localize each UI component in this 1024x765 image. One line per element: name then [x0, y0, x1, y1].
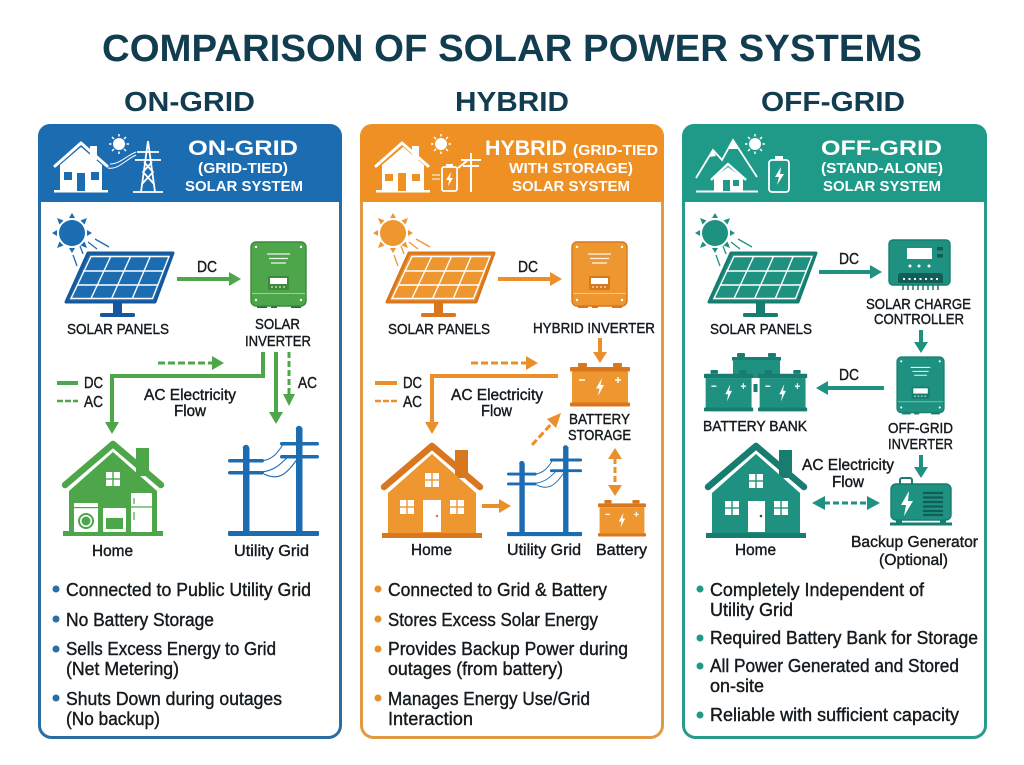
label: ac electricity flow: Flow	[481, 403, 513, 420]
label: ac electricity flow: AC Electricity	[802, 457, 894, 474]
icon: sun	[373, 213, 430, 266]
label: off-grid inverter: OFF-GRID	[888, 421, 953, 437]
bullet list: hybrid: Interaction	[388, 708, 473, 729]
icon: utility grid	[507, 445, 582, 536]
bullet list: off-grid: Required Battery Bank for Storage	[710, 627, 978, 648]
arrow: home to grid	[482, 499, 511, 513]
label: ac electricity flow: Flow	[832, 474, 865, 491]
icon: house with sun, battery and pole	[376, 134, 481, 192]
label: solar inverter	[245, 317, 311, 350]
bullet list: hybrid: Connected to Grid & Battery	[388, 579, 608, 600]
arrow: dashed battery two-way	[608, 448, 622, 496]
icon: sun	[695, 213, 752, 266]
label: ac electricity flow	[802, 457, 894, 491]
label: off-grid inverter	[888, 421, 953, 453]
bullet list: on-grid	[52, 579, 311, 729]
arrow: inverter to generator	[914, 455, 928, 478]
legend: dc and ac: AC	[84, 394, 103, 411]
bullet list: on-grid: No Battery Storage	[66, 609, 214, 630]
icon: home	[382, 446, 482, 538]
arrow: controller to inverter	[914, 330, 928, 353]
header text: on-grid	[185, 137, 303, 195]
panel: off-grid	[682, 124, 987, 738]
bullet list: hybrid	[374, 579, 628, 729]
icon: utility grid	[228, 426, 319, 536]
icon: home	[706, 446, 806, 538]
header text: hybrid: (GRID-TIED	[573, 143, 658, 159]
bullet list: hybrid: Provides Backup Power during	[388, 638, 628, 659]
label: home: Home	[735, 542, 776, 559]
arrow: battery to home	[425, 376, 558, 434]
label: dc: DC	[518, 259, 538, 276]
icon: sun	[52, 213, 109, 266]
bullet list: hybrid: outages (from battery)	[388, 658, 563, 679]
arrow: dashed grid to battery	[532, 413, 561, 445]
legend: dc and ac	[375, 375, 422, 411]
arrow: dashed ac flow	[471, 356, 538, 370]
heading: on-grid: ON-GRID	[124, 86, 255, 117]
bullet list: on-grid: Shuts Down during outages	[66, 688, 282, 709]
bullet list: off-grid: Utility Grid	[710, 599, 793, 620]
bullet list: on-grid: Sells Excess Energy to Grid	[66, 638, 276, 659]
label: utility grid: Utility Grid	[507, 542, 581, 559]
arrow: inverter to battery	[593, 338, 607, 363]
label: battery storage	[568, 412, 631, 444]
label: home: Home	[411, 542, 452, 559]
legend: dc and ac: DC	[84, 375, 103, 392]
label: ac electricity flow: AC Electricity	[144, 387, 236, 404]
bullet list: off-grid	[696, 579, 978, 725]
label: backup generator: (Optional)	[879, 552, 948, 569]
header text: off-grid	[821, 137, 943, 195]
title: COMPARISON OF SOLAR POWER SYSTEMS	[102, 28, 922, 70]
icon: solar panels	[387, 253, 494, 317]
label: dc: DC	[197, 259, 217, 276]
header text: on-grid: (GRID-TIED)	[198, 161, 288, 177]
icon: battery storage	[570, 363, 630, 406]
arrow: dashed ac flow	[158, 356, 224, 370]
label: off-grid inverter: INVERTER	[888, 437, 953, 453]
icon: solar inverter	[251, 242, 306, 308]
arrow: inverter to battery bank	[816, 381, 884, 395]
label: ac electricity flow	[144, 387, 236, 420]
header text: on-grid: SOLAR SYSTEM	[185, 179, 303, 195]
label: battery bank: BATTERY BANK	[703, 419, 807, 435]
label: battery storage: BATTERY	[569, 412, 630, 428]
label: battery storage: STORAGE	[568, 428, 631, 444]
heading: hybrid: HYBRID	[455, 86, 569, 117]
icon: home with appliances	[63, 444, 163, 536]
header text: off-grid: OFF-GRID	[821, 137, 942, 160]
label: backup generator: Backup Generator	[851, 534, 978, 551]
arrow: panels to controller	[819, 265, 882, 279]
bullet list: on-grid: (Net Metering)	[66, 658, 179, 679]
legend: dc and ac: AC	[403, 394, 422, 411]
header text: hybrid: SOLAR SYSTEM	[512, 179, 630, 195]
bullet list: on-grid: (No backup)	[66, 708, 160, 729]
label: solar charge controller: CONTROLLER	[874, 312, 964, 328]
label: utility grid: Utility Grid	[234, 543, 309, 560]
arrow: inverter to grid	[269, 352, 283, 424]
panel: on-grid	[38, 124, 342, 738]
icon: battery	[598, 500, 646, 537]
label: solar charge controller: SOLAR CHARGE	[866, 297, 971, 313]
arrow: inverter to home	[105, 352, 263, 434]
bullet list: on-grid: Connected to Public Utility Grid	[66, 579, 311, 600]
label: backup generator	[851, 534, 978, 569]
label: solar panels: SOLAR PANELS	[67, 322, 169, 338]
bullet list: off-grid: on-site	[710, 675, 764, 696]
icon: solar panels	[66, 253, 173, 317]
label: solar charge controller	[866, 297, 971, 328]
panel header: hybrid	[360, 124, 664, 202]
icon: solar charge controller	[889, 240, 950, 290]
label: solar inverter: SOLAR	[255, 317, 300, 333]
panel header: on-grid	[38, 124, 342, 202]
label: solar panels: SOLAR PANELS	[388, 322, 490, 338]
header text: hybrid: WITH STORAGE)	[509, 161, 633, 177]
header text: on-grid: ON-GRID	[188, 137, 298, 160]
icon: hybrid inverter	[572, 242, 627, 308]
label: dc: DC	[839, 251, 859, 268]
header text: off-grid: SOLAR SYSTEM	[823, 179, 941, 195]
icon: house with sun and pylon	[54, 134, 163, 192]
icon: mountain cabin with sun and battery	[696, 134, 789, 192]
bullet list: off-grid: All Power Generated and Stored	[710, 655, 959, 676]
label: battery: Battery	[596, 542, 647, 559]
arrow: dashed ac to grid	[283, 352, 295, 406]
label: solar inverter: INVERTER	[245, 334, 311, 350]
label: dc: DC	[839, 367, 859, 384]
bullet list: hybrid: Stores Excess Solar Energy	[388, 609, 599, 630]
label: ac electricity flow	[451, 387, 543, 420]
legend: dc and ac: DC	[403, 375, 422, 392]
panel header: off-grid	[682, 124, 987, 202]
heading: off-grid: OFF-GRID	[761, 86, 905, 117]
label: ac electricity flow: Flow	[174, 403, 207, 420]
label: solar panels: SOLAR PANELS	[710, 322, 812, 338]
label: hybrid inverter: HYBRID INVERTER	[533, 321, 655, 337]
header text: off-grid: (STAND-ALONE)	[821, 161, 943, 177]
bullet list: off-grid: Reliable with sufficient capacity	[710, 704, 960, 725]
legend: dc and ac	[57, 375, 103, 411]
label: ac electricity flow: AC Electricity	[451, 387, 543, 404]
header text: hybrid	[485, 137, 658, 195]
label: ac: AC	[298, 375, 317, 392]
arrow: panels to inverter	[177, 272, 241, 286]
icon: backup generator	[890, 478, 952, 526]
bullet list: hybrid: Manages Energy Use/Grid	[388, 688, 590, 709]
icon: solar panels	[709, 253, 816, 317]
arrow: dashed home to generator two-way	[812, 496, 880, 510]
label: home: Home	[92, 543, 133, 560]
icon: off-grid inverter	[897, 357, 944, 414]
header text: hybrid: HYBRID	[485, 137, 567, 160]
arrow: panels to inverter	[498, 272, 562, 286]
icon: battery bank	[704, 353, 807, 411]
bullet list: off-grid: Completely Independent of	[710, 579, 925, 600]
panel: hybrid	[360, 124, 664, 738]
